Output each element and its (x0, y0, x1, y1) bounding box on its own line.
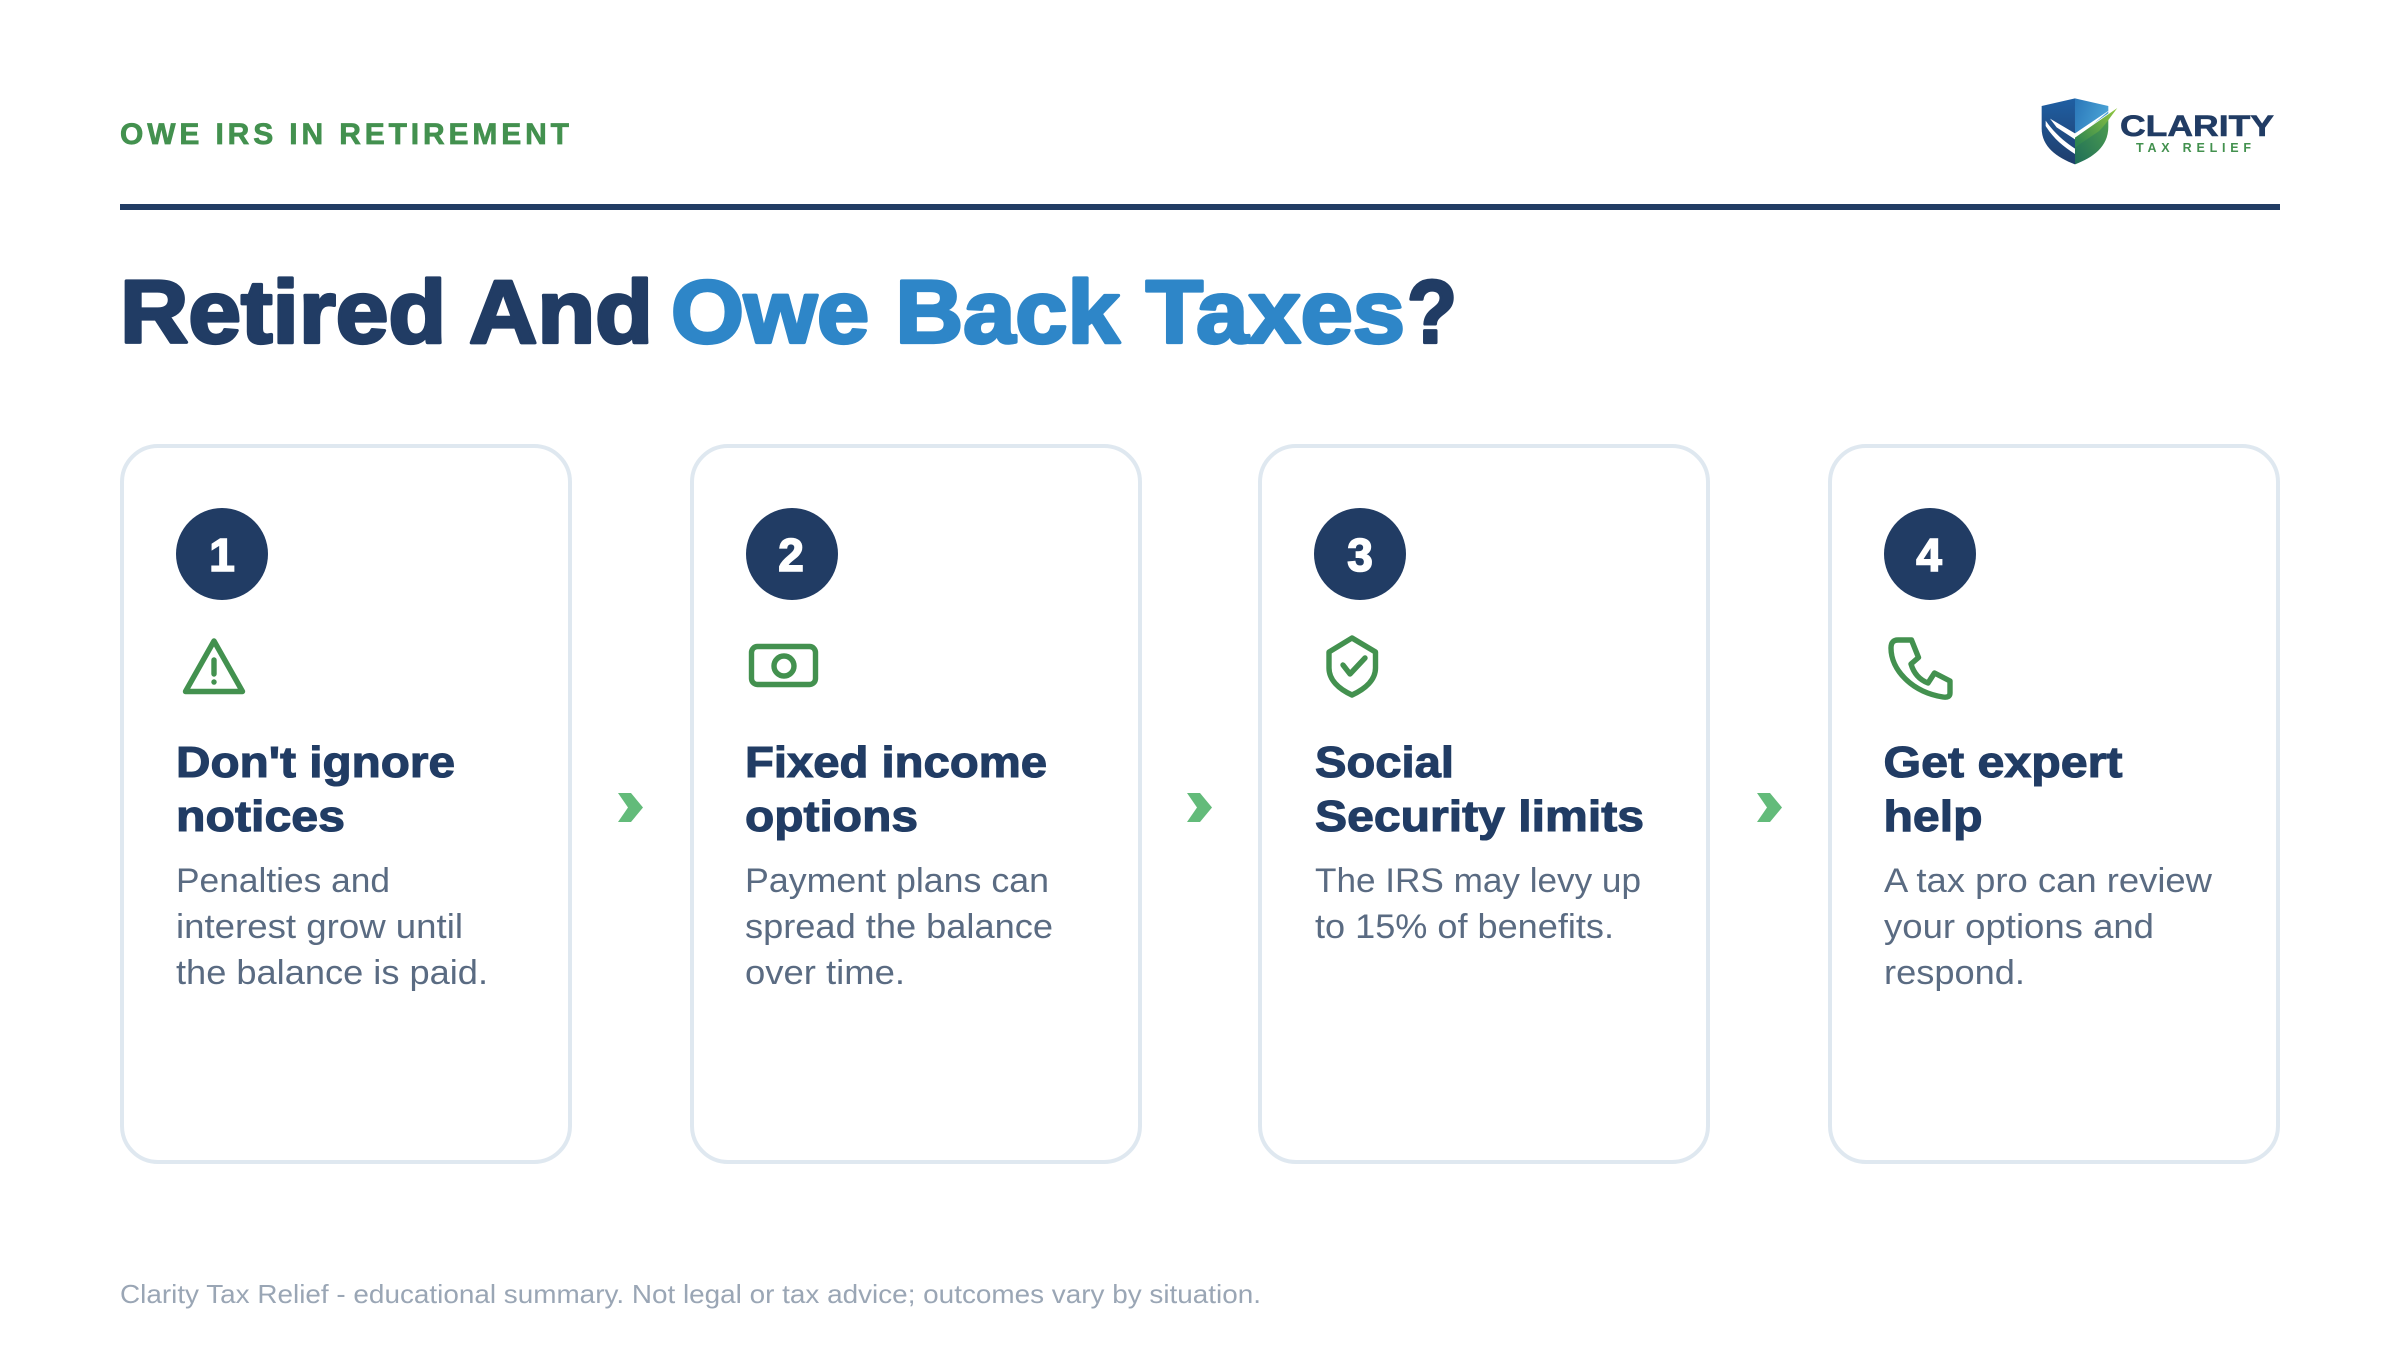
logo tagline: TAX RELIEF (2136, 141, 2251, 155)
body text: spread the balance (745, 908, 1053, 946)
icon: warning triangle (186, 641, 242, 692)
number badge 2: 2 (778, 529, 804, 581)
arrow 2 (1187, 793, 1212, 822)
icon: phone (1891, 640, 1950, 697)
footer disclaimer: Clarity Tax Relief - educational summary. Not legal or tax advice; outcomes vary by situation. (120, 1279, 1261, 1309)
body text: the balance is paid. (176, 954, 488, 992)
icon: shield check (1329, 638, 1376, 695)
heading: Get expert (1884, 738, 2123, 787)
number badge 1: 1 (209, 529, 235, 581)
body text: Payment plans can (745, 862, 1049, 900)
arrow 1 (618, 793, 643, 822)
card outline (1260, 446, 1708, 1162)
card outline (122, 446, 570, 1162)
heading: help (1884, 792, 1982, 841)
title: Retired And (120, 262, 653, 362)
body text (745, 862, 1053, 992)
body text: respond. (1884, 954, 2025, 992)
heading (745, 738, 1047, 841)
number badge 3 (1314, 508, 1406, 600)
number badge 4: 4 (1916, 529, 1942, 581)
heading: options (745, 792, 918, 841)
header rule (120, 204, 2280, 210)
number badge 4 (1884, 508, 1976, 600)
heading: Fixed income (745, 738, 1047, 787)
heading (1315, 738, 1644, 841)
body text (176, 862, 488, 992)
heading: Don't ignore (176, 738, 455, 787)
body text: your options and (1884, 908, 2154, 946)
arrow 3 (1757, 793, 1782, 822)
title (120, 262, 1457, 362)
logo wordmark: CLARITY (2120, 110, 2274, 143)
panel: step 1 (122, 446, 570, 1162)
heading (1884, 738, 2123, 841)
title: Owe Back Taxes (671, 262, 1405, 362)
logo: Clarity Tax Relief (2042, 98, 2274, 164)
body text: A tax pro can review (1884, 862, 2212, 900)
body text (1315, 862, 1641, 946)
body text: interest grow until (176, 908, 463, 946)
card outline (692, 446, 1140, 1162)
number badge 3: 3 (1347, 529, 1373, 581)
logo shield icon (2042, 98, 2117, 164)
heading: Security limits (1315, 792, 1644, 841)
body text: over time. (745, 954, 905, 992)
kicker label: OWE IRS IN RETIREMENT (120, 118, 569, 151)
card outline (1830, 446, 2278, 1162)
heading: notices (176, 792, 345, 841)
number badge 1 (176, 508, 268, 600)
panel: step 3 (1260, 446, 1708, 1162)
body text (1884, 862, 2212, 992)
title: ? (1407, 262, 1457, 362)
icon: banknote (752, 646, 816, 684)
number badge 2 (746, 508, 838, 600)
heading (176, 738, 455, 841)
panel: step 4 (1830, 446, 2278, 1162)
body text: The IRS may levy up (1315, 862, 1641, 900)
body text: to 15% of benefits. (1315, 908, 1614, 946)
panel: step 2 (692, 446, 1140, 1162)
heading: Social (1315, 738, 1454, 787)
body text: Penalties and (176, 862, 390, 900)
